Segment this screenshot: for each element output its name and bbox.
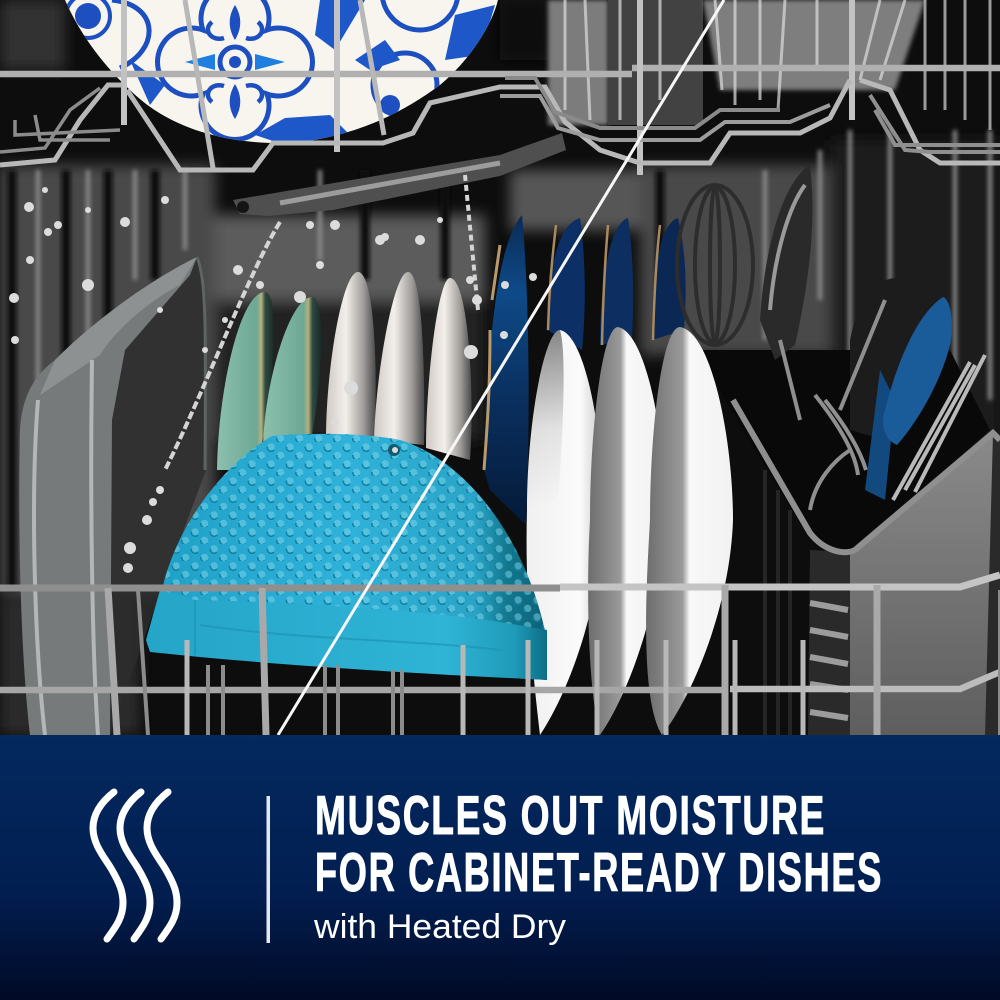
green plates behind [217, 292, 321, 470]
utensils and whisk [675, 167, 990, 510]
lower rack wires [0, 575, 1000, 735]
spray arm [233, 133, 566, 216]
cutlery basket [733, 400, 1000, 735]
bottom banner [0, 735, 1000, 1000]
subheading: with Heated Dry [313, 908, 566, 946]
water droplets [9, 187, 537, 573]
top rack glasses [548, 0, 990, 130]
water spray stream [165, 175, 478, 470]
white plates foreground [527, 327, 733, 735]
turquoise bowl [146, 434, 547, 680]
white plates behind [326, 272, 472, 460]
glass baking dish [19, 257, 206, 735]
top plate with blue pattern [65, 0, 498, 150]
divider [266, 796, 270, 943]
photo background [0, 0, 1000, 735]
navy plates behind [484, 215, 686, 525]
diagonal divider line [278, 0, 724, 735]
icon: heat waves [93, 792, 177, 939]
upper rack wires [0, 0, 1000, 175]
